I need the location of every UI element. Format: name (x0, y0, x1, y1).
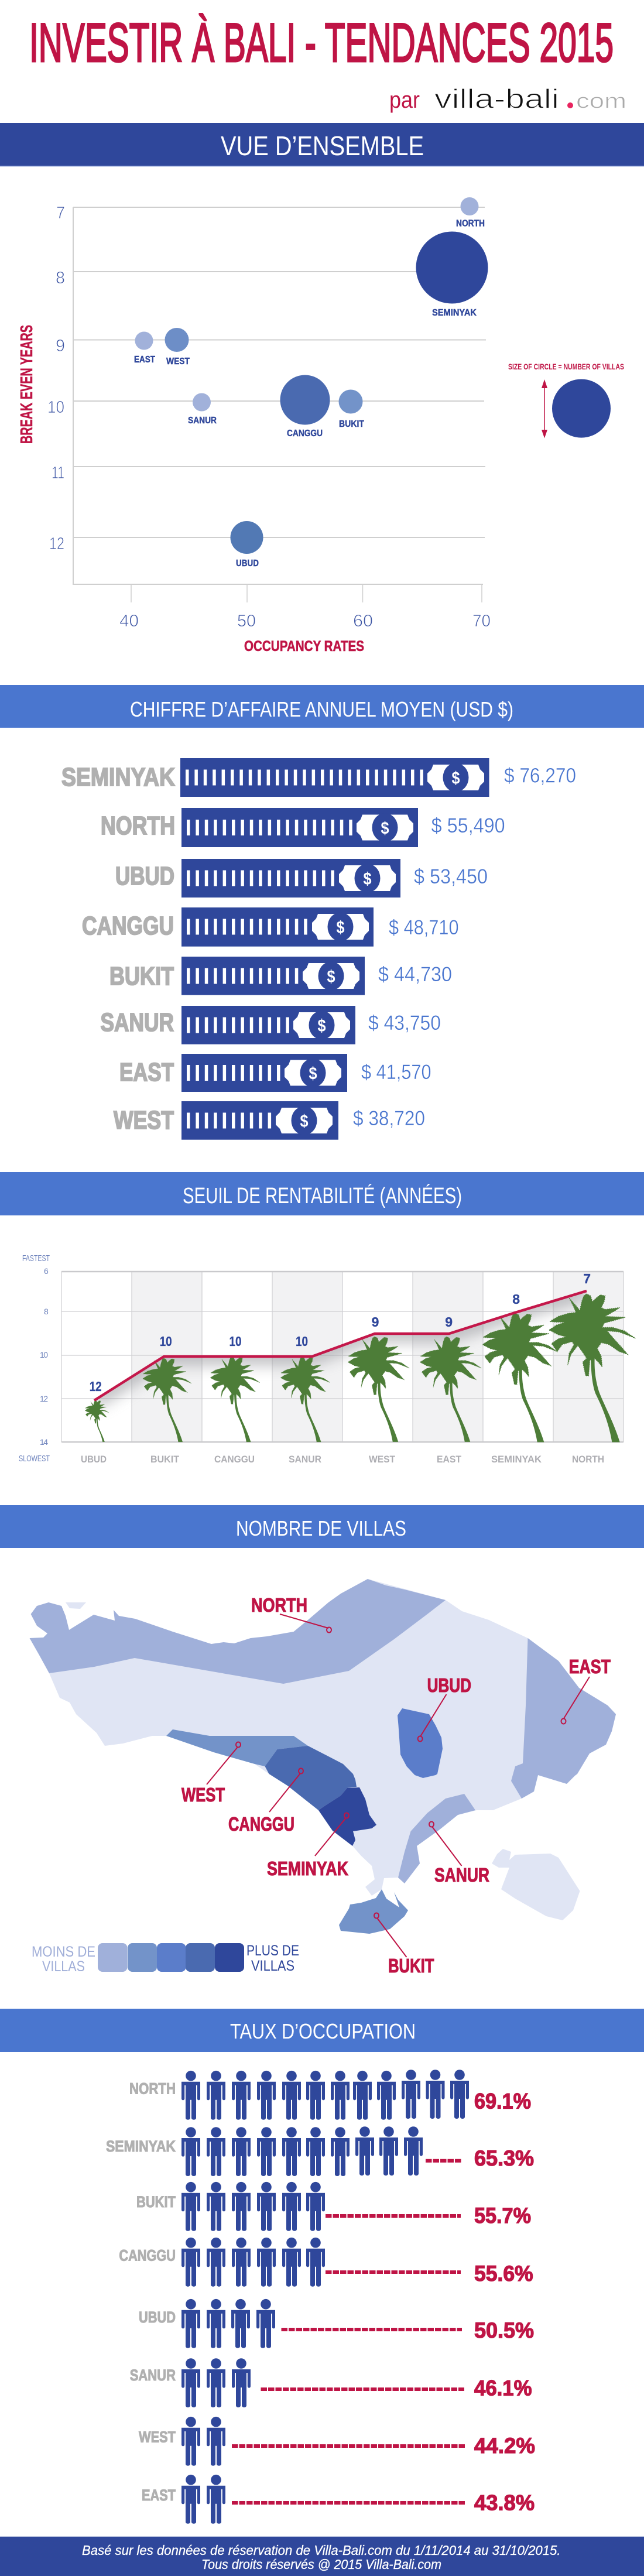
bar: sanur: SANUR (101, 1008, 174, 1037)
year values: 12 (90, 1379, 102, 1394)
bar: sanur (101, 1006, 441, 1044)
logo: com: com (576, 89, 626, 112)
callout: west: WEST (181, 1784, 225, 1806)
callout: canggu (228, 1768, 303, 1835)
row: west: WEST (139, 2428, 176, 2446)
speed labels: 10 (40, 1350, 48, 1359)
map: nusa island (492, 1849, 580, 1920)
palm: canggu (210, 1357, 260, 1442)
bar: sanur: $ 43,750 (368, 1012, 441, 1034)
row: canggu (119, 2238, 533, 2287)
y axis numbers: 8 (56, 269, 65, 287)
speed labels: SLOWEST (19, 1454, 50, 1464)
row: ubud: UBUD (139, 2308, 176, 2326)
callout: north (251, 1594, 331, 1632)
map: northwest islet (66, 1602, 86, 1609)
bubble: canggu (280, 375, 330, 439)
legend: villa count scale: VILLAS (42, 1958, 85, 1975)
palm: east (420, 1337, 481, 1442)
bubble: east (134, 331, 155, 365)
bubble: sanur: SANUR (188, 416, 217, 426)
bar: north: $ (381, 818, 389, 838)
x axis numbers: 40 (119, 612, 139, 631)
bar: bukit: $ 44,730 (378, 963, 452, 986)
year values: 9 (445, 1314, 453, 1330)
trend line (94, 1291, 587, 1400)
year values: 10 (296, 1334, 308, 1349)
y axis numbers: 7 (56, 204, 65, 222)
region: canggu (265, 1746, 357, 1810)
bubble: seminyak (416, 232, 488, 318)
year values (90, 1271, 591, 1394)
row: seminyak (106, 2126, 534, 2176)
banner: seuil de rentabilite: SEUIL DE RENTABILITÉ (ANNÉES) (183, 1183, 462, 1208)
region: ubud (398, 1708, 443, 1778)
bar: canggu: $ 48,710 (389, 916, 459, 939)
panel: revenue bars (61, 758, 576, 1140)
map: island base (49, 1579, 616, 1896)
callout: bukit (374, 1913, 434, 1976)
row: sanur: SANUR (130, 2366, 176, 2384)
palm: bukit (143, 1358, 191, 1442)
callout: bukit: BUKIT (388, 1955, 434, 1976)
year values: 9 (372, 1314, 379, 1330)
banner: seuil de rentabilite (0, 1172, 644, 1215)
bubble: ubud (231, 521, 263, 568)
par: par (389, 87, 420, 113)
bar: ubud: $ (363, 869, 372, 889)
footer (0, 2537, 644, 2576)
panel: break-even palm chart (19, 1253, 635, 1465)
bar: east (119, 1054, 431, 1092)
bubble: sanur (188, 393, 217, 426)
region: seminyak (318, 1787, 376, 1846)
speed labels: 14 (40, 1437, 48, 1447)
legend: villa count scale: MOINS DE (32, 1944, 95, 1960)
year values: 10 (160, 1334, 172, 1349)
bubble: ubud: UBUD (236, 559, 259, 568)
district labels: UBUD (81, 1454, 107, 1465)
speed labels: 12 (40, 1394, 48, 1403)
bar: east: EAST (119, 1058, 174, 1087)
bar: west (114, 1101, 425, 1140)
region: east (511, 1638, 616, 1799)
row: east (142, 2475, 535, 2524)
callout: canggu: CANGGU (228, 1813, 294, 1835)
bar: west: $ 38,720 (353, 1107, 425, 1130)
row: seminyak: 65.3% (474, 2146, 534, 2170)
bubble: bukit (338, 390, 364, 429)
row: sanur: 46.1% (474, 2376, 532, 2400)
row: east: EAST (142, 2486, 176, 2504)
region: sanur (398, 1794, 475, 1883)
year values: 10 (229, 1334, 241, 1349)
x axis numbers: 70 (472, 612, 491, 631)
row: north: 69.1% (474, 2089, 531, 2113)
legend: villa count scale: PLUS DE (246, 1943, 299, 1959)
banner: taux d'occupation: TAUX D’OCCUPATION (230, 2019, 416, 2043)
bubble: east: EAST (134, 355, 155, 365)
banner: chiffre d'affaire: CHIFFRE D’AFFAIRE ANNUEL MOYEN (USD $) (130, 697, 513, 721)
palm: ubud (85, 1400, 109, 1442)
speed labels: 6 (44, 1266, 49, 1276)
bar: ubud: $ 53,450 (414, 865, 488, 888)
logo: villa-bali: villa-bali (434, 83, 559, 114)
row: ubud (139, 2299, 534, 2348)
district labels: BUKIT (150, 1454, 180, 1465)
palm: seminyak (482, 1313, 557, 1442)
row: west: 44.2% (474, 2434, 535, 2458)
bubble: north (456, 197, 485, 228)
bubble: seminyak: SEMINYAK (432, 308, 477, 318)
bar: sanur: $ (317, 1016, 326, 1036)
bubble: canggu: CANGGU (287, 429, 323, 439)
callout: sanur: SANUR (434, 1864, 489, 1886)
district labels: EAST (437, 1454, 462, 1465)
row: east: 43.8% (474, 2491, 535, 2515)
line shadow (94, 1291, 587, 1400)
row: ubud: 50.5% (474, 2318, 534, 2342)
bar: north: $ 55,490 (431, 814, 505, 837)
bar: seminyak (61, 758, 576, 797)
district labels: CANGGU (214, 1454, 255, 1465)
y axis numbers: 9 (56, 337, 65, 355)
bar: west: WEST (114, 1106, 174, 1135)
bar: canggu: CANGGU (82, 912, 174, 940)
bar: seminyak: $ 76,270 (504, 765, 576, 787)
bar: east: $ 41,570 (361, 1061, 431, 1084)
row: seminyak: SEMINYAK (106, 2137, 176, 2155)
bubble: west (165, 328, 190, 366)
y axis numbers: 12 (49, 535, 64, 553)
footer: Basé sur les données de réservation de Villa-Bali.com du 1/11/2014 au 31/10/2015. (82, 2543, 561, 2558)
callout: east: EAST (569, 1656, 611, 1677)
panel: bubble chart (18, 197, 624, 655)
banner: chiffre d'affaire (0, 685, 644, 728)
bar: seminyak: $ (452, 769, 460, 788)
banner: vue d'ensemble: VUE D’ENSEMBLE (221, 131, 424, 161)
district labels: NORTH (572, 1454, 604, 1465)
callout: east (561, 1656, 611, 1724)
speed labels: FASTEST (22, 1253, 50, 1263)
brand line: par villa-bali.com (389, 83, 626, 114)
region: north (29, 1579, 446, 1684)
callout: seminyak: SEMINYAK (267, 1858, 348, 1879)
year values: 7 (583, 1271, 591, 1286)
x axis numbers: 50 (237, 612, 256, 631)
district labels: WEST (369, 1454, 396, 1465)
panel: occupancy pictogram (106, 2070, 535, 2524)
region: west (166, 1729, 308, 1766)
bar: bukit (109, 957, 452, 995)
district labels: SEMINYAK (491, 1454, 542, 1465)
banner: nombre de villas: NOMBRE DE VILLAS (236, 1516, 406, 1540)
speed labels (19, 1253, 50, 1464)
bar: bukit: BUKIT (109, 962, 174, 991)
footer: Tous droits réservés @ 2015 Villa-Bali.com (201, 2557, 441, 2572)
row: bukit: BUKIT (136, 2193, 176, 2211)
row: bukit (136, 2182, 531, 2231)
row: west (139, 2417, 535, 2466)
bar: canggu (82, 907, 459, 947)
legend: villa count scale (32, 1943, 299, 1975)
row: north (129, 2070, 531, 2120)
bar: bukit: $ (327, 967, 335, 986)
speed labels: 8 (44, 1307, 49, 1316)
bar: seminyak: SEMINYAK (61, 763, 175, 792)
legend: villa count scale: VILLAS (251, 1958, 294, 1974)
bar: west: $ (300, 1112, 309, 1131)
panel: map of Bali (29, 1579, 616, 1976)
callout: sanur (429, 1822, 489, 1886)
palm: west (348, 1337, 409, 1442)
bar: north (101, 808, 505, 847)
bar: east: $ (309, 1064, 317, 1083)
district labels (81, 1454, 604, 1465)
palm: sanur (280, 1357, 330, 1442)
row: canggu: CANGGU (119, 2247, 176, 2265)
row: sanur (130, 2358, 532, 2407)
bubble: west: WEST (166, 357, 190, 366)
bar: ubud: UBUD (115, 862, 174, 890)
row: bukit: 55.7% (474, 2204, 531, 2228)
bar: ubud (115, 859, 488, 898)
y axis numbers (47, 204, 65, 553)
callout: ubud: UBUD (427, 1674, 471, 1696)
banner: vue d'ensemble (0, 123, 644, 166)
x axis numbers: 60 (353, 612, 373, 631)
district labels: SANUR (289, 1454, 321, 1465)
callout: north: NORTH (251, 1594, 307, 1616)
y axis numbers: 11 (52, 464, 64, 482)
banner: taux d'occupation (0, 2009, 644, 2052)
palm: north (549, 1294, 635, 1442)
region: bukit (339, 1889, 408, 1934)
row: canggu: 55.6% (474, 2262, 533, 2286)
callout: west (181, 1742, 241, 1806)
callout: ubud (418, 1674, 471, 1741)
y axis numbers: 10 (47, 398, 64, 417)
bar: canggu: $ (336, 918, 345, 937)
x axis numbers (119, 612, 491, 631)
callout: seminyak (267, 1813, 349, 1879)
bubble: north: NORTH (456, 219, 485, 228)
year values: 8 (512, 1292, 520, 1307)
y axis title: BREAK EVEN YEARS (18, 325, 36, 444)
legend: circle size (508, 362, 624, 438)
x axis title: OCCUPANCY RATES (244, 638, 364, 655)
banner: nombre de villas (0, 1505, 644, 1548)
logo dot (567, 102, 573, 108)
bubble: bukit: BUKIT (339, 419, 364, 429)
bar: north: NORTH (101, 811, 175, 840)
row: north: NORTH (129, 2080, 176, 2098)
